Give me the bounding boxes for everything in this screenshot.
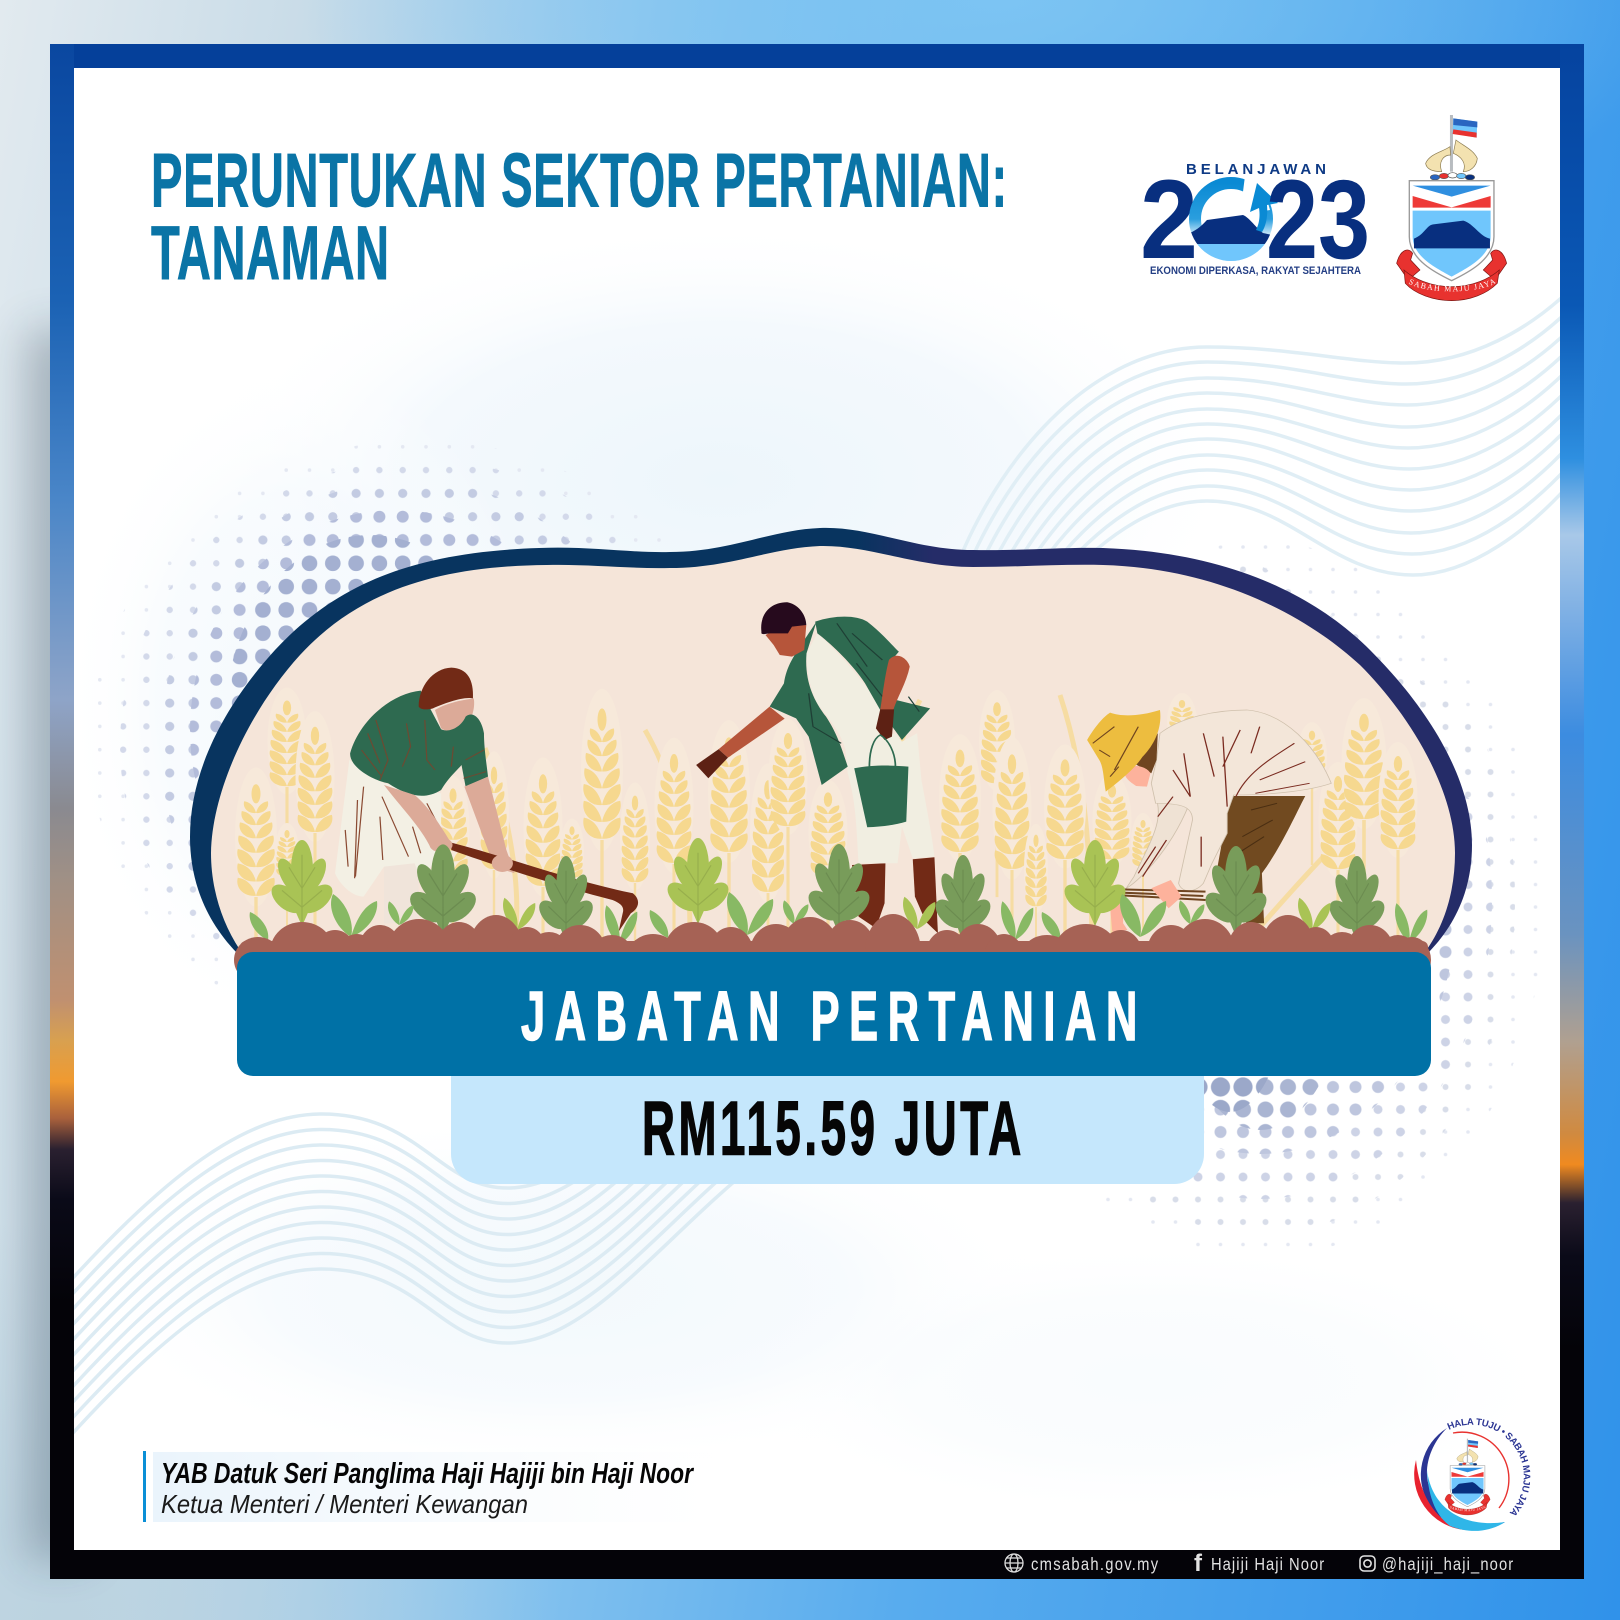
attribution block bbox=[143, 1451, 713, 1522]
wheat field bbox=[235, 688, 1418, 1053]
logo: Belanjawan 2023: BELANJAWAN bbox=[1186, 161, 1326, 178]
logo: Sabah coat of arms bbox=[1396, 115, 1507, 301]
halftone dots: upper left bbox=[98, 445, 660, 984]
logo: Belanjawan 2023: 2 bbox=[1140, 157, 1198, 282]
footer social links: cmsabah.gov.my bbox=[1031, 1555, 1159, 1574]
banner: Jabatan Pertanian bbox=[237, 952, 1431, 1076]
attribution block: Ketua Menteri / Menteri Kewangan bbox=[161, 1489, 528, 1519]
footer social links bbox=[1005, 1550, 1514, 1577]
plants row bbox=[250, 838, 1427, 944]
banner text: JABATAN PERTANIAN bbox=[521, 977, 1137, 1056]
logo ring with mountain bbox=[1185, 176, 1278, 264]
amount text: RM115.59 JUTA bbox=[642, 1087, 1021, 1171]
title: TANAMAN bbox=[151, 212, 389, 296]
logo: Belanjawan 2023 bbox=[1144, 164, 1367, 276]
title: PERUNTUKAN SEKTOR PERTANIAN: bbox=[151, 139, 1007, 223]
figure: man with bucket bbox=[696, 602, 938, 933]
figure: farmer with straw hat bbox=[1087, 710, 1331, 932]
logo: Hala Tuju Sabah Maju Jaya: HALA TUJU • SABAH MAJU JAYA bbox=[1447, 1418, 1530, 1516]
attribution block: YAB Datuk Seri Panglima Haji Hajiji bin Haji Noor bbox=[161, 1458, 694, 1490]
footer social links: f bbox=[1194, 1550, 1203, 1577]
title bbox=[151, 139, 1007, 296]
blob frame: outer dark outline bbox=[190, 528, 1472, 953]
wave lines: lower left bbox=[74, 1112, 734, 1434]
soil mounds bbox=[234, 914, 1431, 990]
icon: instagram bbox=[1360, 1556, 1375, 1571]
page shadow behind frame bbox=[28, 330, 88, 1560]
logo: Sabah coat of arms: SABAH MAJU JAYA bbox=[1408, 279, 1496, 292]
footer social links: @hajiji_haji_noor bbox=[1382, 1555, 1514, 1574]
footer social links: Hajiji Haji Noor bbox=[1211, 1555, 1325, 1574]
amount panel: light blue bbox=[451, 1040, 1204, 1184]
blob interior: beige field bbox=[211, 546, 1455, 952]
logo: Hala Tuju Sabah Maju Jaya bbox=[1414, 1418, 1530, 1531]
halftone dots: lower right bbox=[1106, 545, 1538, 1246]
logo: Belanjawan 2023: 23 bbox=[1266, 157, 1370, 282]
wave lines: upper right bbox=[962, 297, 1560, 577]
icon: globe bbox=[1005, 1554, 1023, 1572]
figure: woman with hoe bbox=[335, 668, 638, 932]
logo: Belanjawan 2023: EKONOMI DIPERKASA, RAKYAT SEJAHTERA bbox=[1150, 265, 1361, 277]
